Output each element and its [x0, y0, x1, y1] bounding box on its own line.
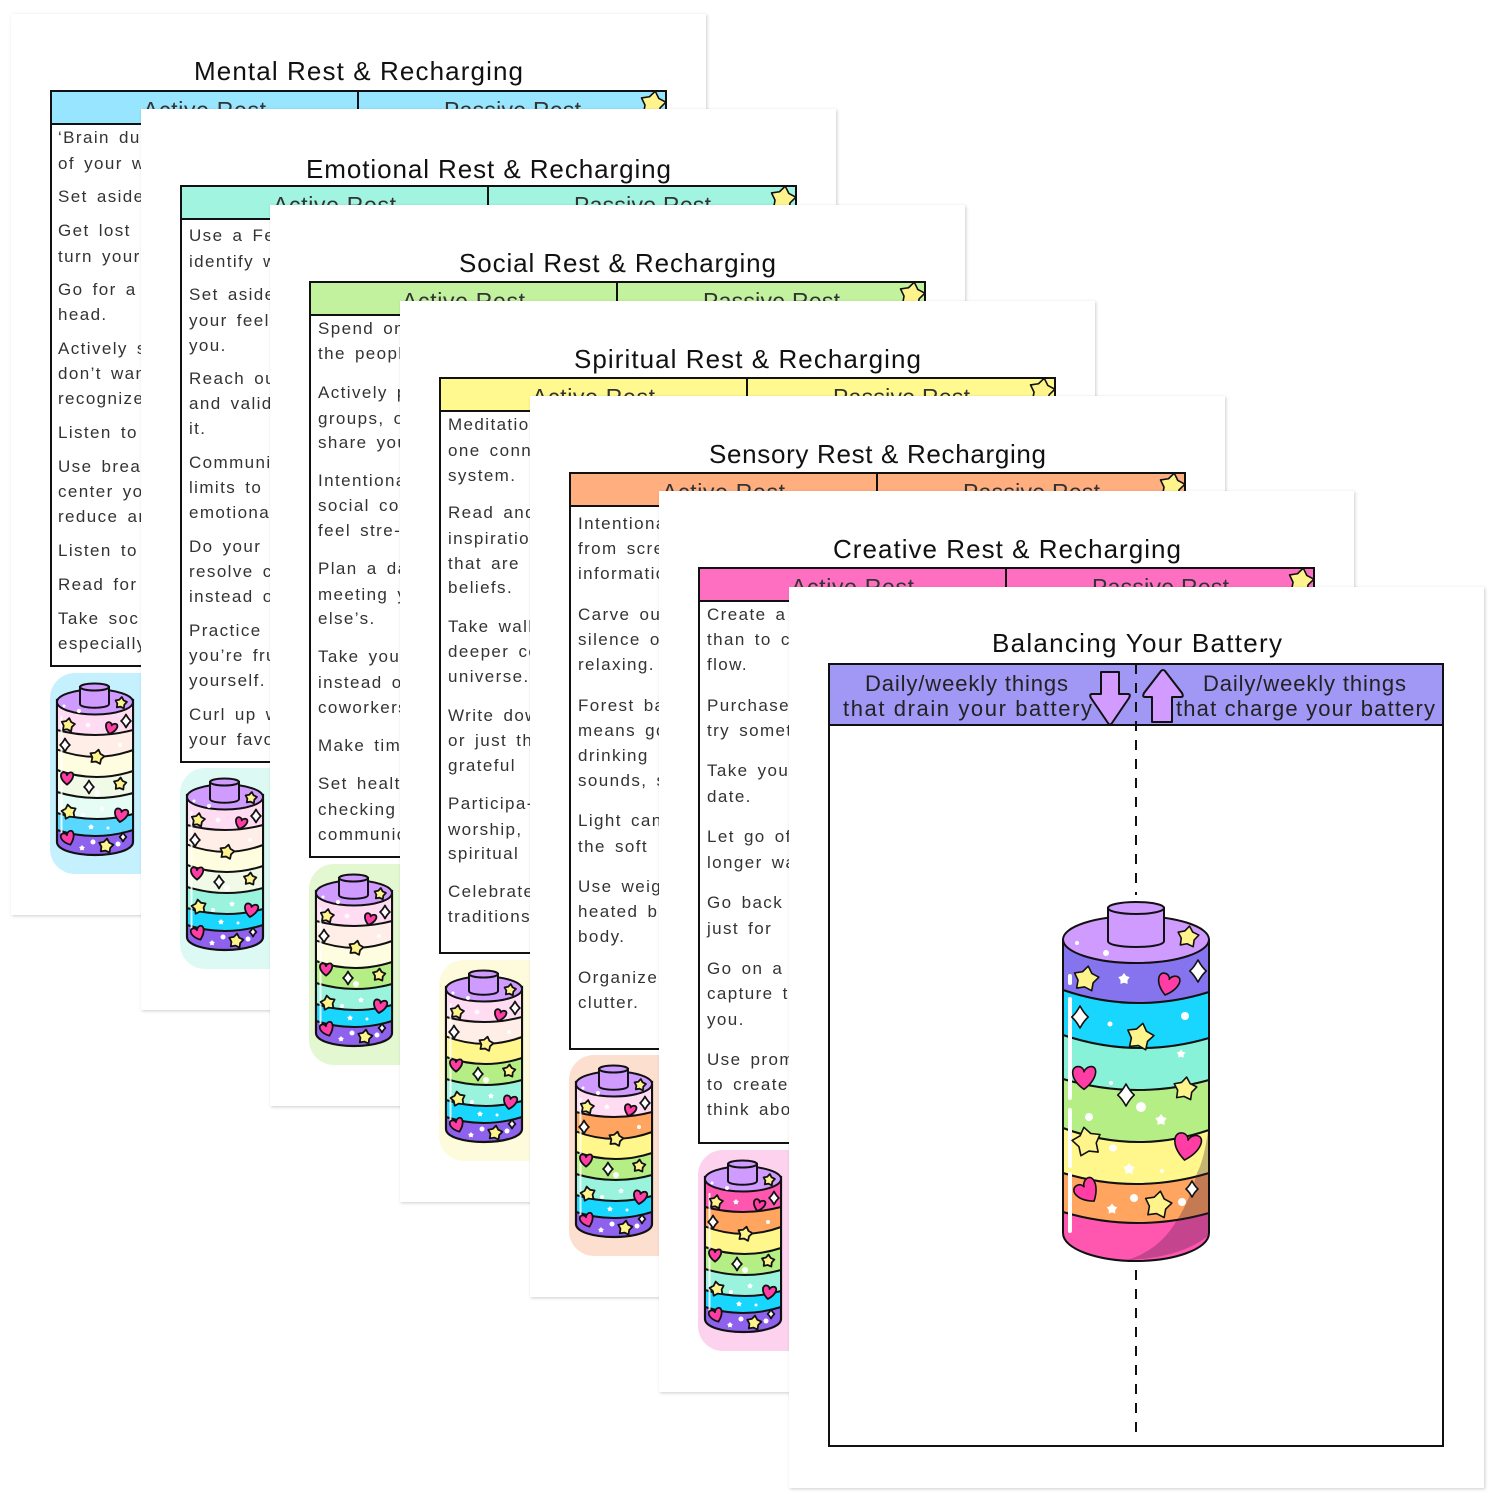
sheet — [530, 396, 1225, 1297]
table text: think abo — [707, 1100, 792, 1119]
table text: communicate — [318, 825, 434, 844]
table: Passive Rest — [574, 192, 712, 218]
table text: from screens — [578, 539, 696, 558]
table text: Take your — [707, 761, 796, 780]
table text: Practice — [189, 621, 262, 640]
title: Mental Rest & Recharging — [194, 56, 523, 86]
table text: Go back — [707, 893, 783, 912]
table text: Get lost — [58, 221, 131, 240]
header text: drain: Daily/weekly things — [865, 671, 1068, 696]
table: Active Rest — [273, 192, 397, 218]
table text: Actively plan — [318, 383, 435, 402]
table text: capture t — [707, 984, 789, 1003]
table text: Participa- — [448, 794, 534, 813]
header text: charge — [1176, 671, 1435, 721]
worksheet: Mental Rest — [11, 14, 706, 915]
table text: Carve out — [578, 605, 667, 624]
arrow: down — [1090, 672, 1130, 724]
header text: drain — [843, 671, 1092, 721]
table text: of your worries — [58, 154, 196, 173]
header text: charge: Daily/weekly things — [1203, 671, 1406, 696]
table text — [318, 319, 435, 844]
table text: one connected — [448, 441, 581, 460]
table text: coworkers — [318, 698, 408, 717]
table text: Read and — [448, 503, 536, 522]
header text: drain: that drain your battery — [843, 696, 1092, 721]
table text: deeper con — [448, 642, 550, 661]
table: Active Rest — [791, 574, 915, 600]
table text: beliefs. — [448, 578, 513, 597]
table text: Do your best — [189, 537, 308, 556]
table: Passive Rest — [833, 384, 971, 410]
table: Active Rest — [402, 288, 526, 314]
table text: heated blanket — [578, 902, 712, 921]
table text: checking — [318, 800, 396, 819]
table text: ‘Brain dump — [58, 128, 167, 147]
worksheet: Emotional Rest — [141, 109, 836, 1010]
table text: Reach out — [189, 369, 282, 388]
table text: to create — [707, 1075, 789, 1094]
table text: Make time — [318, 736, 412, 755]
table text: or just the — [448, 731, 544, 750]
table text: groups, or — [318, 409, 412, 428]
table: Active Rest — [143, 97, 267, 123]
table — [310, 280, 926, 857]
table text: that are — [448, 554, 520, 573]
table text: longer wa — [707, 853, 796, 872]
table text: you. — [707, 1010, 745, 1029]
table text: Celebrate — [448, 882, 534, 901]
title: Social Rest & Recharging — [459, 248, 776, 278]
table text: relaxing. — [578, 655, 655, 674]
table text: clutter. — [578, 993, 639, 1012]
table text: Organize — [578, 968, 658, 987]
table — [181, 184, 797, 762]
battery tile — [180, 768, 300, 969]
table text — [706, 605, 806, 1119]
table text: Use brea- — [58, 457, 148, 476]
table text: Use weighted — [578, 877, 701, 896]
table text: flow. — [707, 655, 748, 674]
table: Passive Rest — [963, 479, 1101, 505]
table: Passive Rest — [444, 97, 582, 123]
table text: don’t want — [58, 364, 152, 383]
table text: instead of — [189, 587, 280, 606]
table text: share your — [318, 433, 415, 452]
battery tile — [50, 673, 170, 874]
table text: social con — [318, 496, 411, 515]
table text — [578, 514, 712, 1012]
battery tile — [698, 1150, 818, 1351]
table — [51, 89, 667, 666]
worksheet: Sensory Rest — [530, 396, 1225, 1297]
table text: Meditation — [448, 415, 540, 434]
table text: resolve conflict — [189, 562, 327, 581]
table text: Intentional — [318, 471, 412, 490]
table text — [189, 226, 339, 749]
table text: try somet — [707, 721, 793, 740]
table text: feel stre- — [318, 521, 401, 540]
battery tile — [309, 864, 429, 1065]
table text: body. — [578, 927, 625, 946]
table text: Forest bath — [578, 696, 682, 715]
table text — [58, 128, 196, 653]
table — [570, 471, 1186, 1049]
worksheet: Social Rest — [270, 205, 965, 1106]
table text: just for — [706, 919, 772, 938]
worksheet: Spiritual Rest — [400, 301, 1095, 1202]
table text: Create a — [707, 605, 786, 624]
table text: spiritual — [448, 844, 519, 863]
table text: Spend one — [318, 319, 416, 338]
table text: system. — [448, 466, 516, 485]
table text: silence or — [578, 630, 668, 649]
table text: head. — [58, 305, 108, 324]
table text: Curl up with — [189, 705, 302, 724]
table text: Write down — [448, 706, 550, 725]
table text: the people — [318, 344, 414, 363]
table text: worship, ri — [447, 820, 544, 839]
table text: your feelings — [189, 311, 307, 330]
table text: you’re frustrated — [189, 646, 339, 665]
table text — [447, 415, 581, 926]
table: Passive Rest — [1092, 574, 1230, 600]
worksheet: Creative Rest — [659, 491, 1354, 1392]
table text: Let go of — [707, 827, 792, 846]
table text: yourself. — [189, 671, 266, 690]
table text: turn your — [58, 247, 141, 266]
table text: Plan a day — [318, 559, 418, 578]
table text: else’s. — [318, 609, 376, 628]
sheet — [789, 587, 1484, 1488]
table — [440, 376, 1056, 953]
title: Balancing Your Battery — [992, 628, 1282, 658]
table text: recognize — [58, 389, 144, 408]
table text: Go on a — [707, 959, 783, 978]
table text: Take your — [318, 647, 407, 666]
table text: it. — [189, 419, 206, 438]
table text: information — [578, 564, 678, 583]
table — [829, 664, 1443, 1446]
table text: grateful — [448, 756, 516, 775]
table text: especially — [58, 634, 147, 653]
sheet — [400, 301, 1095, 1202]
table text: Take walks — [448, 617, 548, 636]
battery tile — [439, 960, 559, 1161]
worksheet: Balancing Your Battery — [789, 587, 1484, 1488]
table text: instead of — [318, 673, 409, 692]
table text: center you — [58, 482, 154, 501]
table text: meeting you — [318, 585, 429, 604]
sheet — [270, 205, 965, 1106]
arrow: up — [1143, 670, 1183, 722]
table text: Actively s — [58, 339, 147, 358]
table text: Go for a — [58, 280, 137, 299]
table text: Set health — [318, 774, 412, 793]
table text: Light candle — [578, 811, 689, 830]
table text: traditions — [448, 907, 531, 926]
table text: Read for — [58, 575, 137, 594]
title: Spiritual Rest & Recharging — [574, 344, 921, 374]
table text: Listen to — [58, 423, 138, 442]
table: Active Rest — [662, 479, 786, 505]
table text: inspiration — [448, 529, 541, 548]
table text: Set aside — [189, 285, 275, 304]
sheet — [11, 14, 706, 915]
table text: universe. — [448, 667, 530, 686]
table: Active Rest — [532, 384, 656, 410]
table — [699, 566, 1315, 1143]
table text: means going — [578, 721, 694, 740]
table text: Intentional — [578, 514, 672, 533]
table text: your favorite — [189, 730, 304, 749]
sheet — [141, 109, 836, 1010]
table text: emotional — [189, 503, 275, 522]
battery illustration — [1063, 902, 1209, 1261]
table text: sounds, s — [578, 771, 666, 790]
sheet — [659, 491, 1354, 1392]
title: Emotional Rest & Recharging — [306, 154, 671, 184]
table text: Listen to — [58, 541, 138, 560]
header text: charge: that charge your battery — [1176, 696, 1435, 721]
table text: reduce an — [58, 507, 149, 526]
table text: Purchase — [707, 696, 790, 715]
title: Sensory Rest & Recharging — [709, 439, 1046, 469]
table text: and validate — [189, 394, 300, 413]
table text: identify what — [189, 252, 305, 271]
table text: date. — [707, 787, 752, 806]
table text: Set aside — [58, 187, 144, 206]
table text: limits to — [189, 478, 262, 497]
table text: Use promp — [707, 1050, 806, 1069]
table text: you. — [189, 336, 227, 355]
table text: than to c — [707, 630, 791, 649]
battery tile — [569, 1055, 689, 1256]
table text: Communicate — [189, 453, 309, 472]
title: Creative Rest & Recharging — [833, 534, 1181, 564]
table: Passive Rest — [703, 288, 841, 314]
table text: the soft — [578, 837, 648, 856]
table text: Use a Feelings — [189, 226, 328, 245]
table text: drinking — [578, 746, 649, 765]
table text: Take soc — [58, 609, 139, 628]
